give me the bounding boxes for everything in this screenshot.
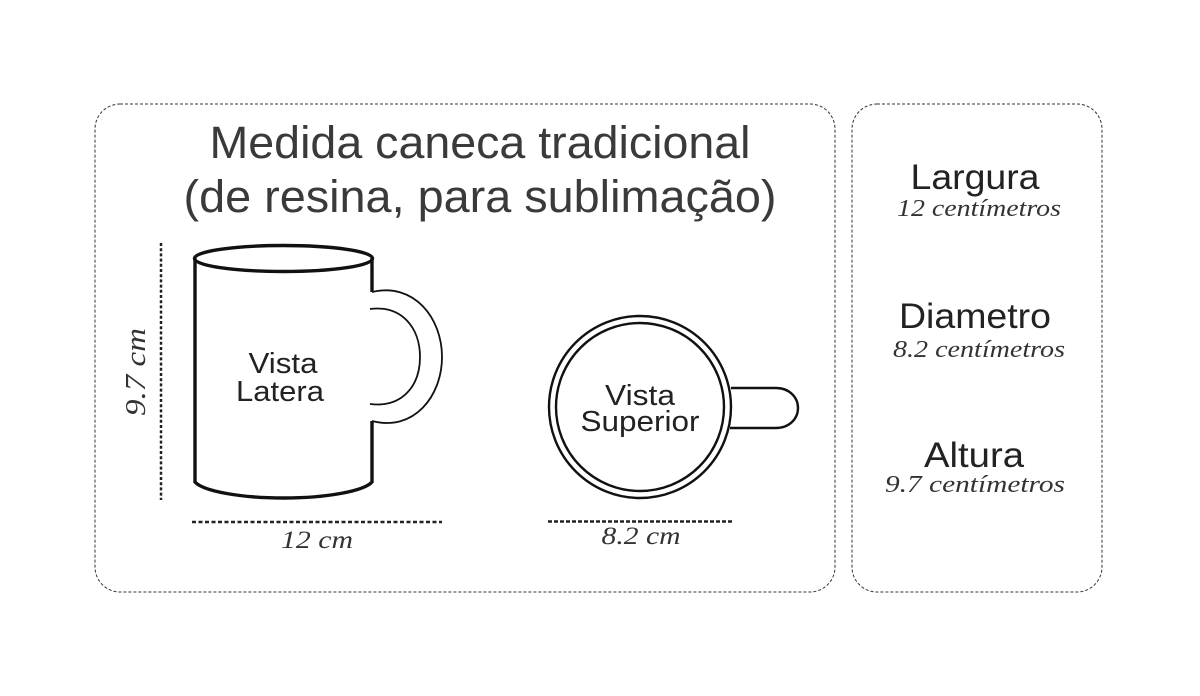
item: altura [885,436,1065,498]
panel: mug measurements [95,104,835,592]
icon: mug top view [549,316,798,498]
label: top view: Vista [605,380,676,412]
item: largura [897,158,1061,222]
label: side view: Latera [236,376,325,408]
dimension: width: 12 cm [281,527,353,554]
item: largura: 12 centímetros [897,196,1061,222]
item: largura: Largura [910,158,1040,197]
item: altura: Altura [924,436,1025,475]
title [184,117,776,222]
label: side view [236,348,325,408]
panel: measurements list [852,104,1102,592]
dimension: diameter: 8.2 cm [602,523,680,550]
title: (de resina, para sublimação) [184,171,776,222]
label: side view: Vista [248,348,318,380]
item: diametro: 8.2 centímetros [893,337,1065,363]
title: Medida caneca tradicional [210,117,750,168]
dimension: height: 9.7 cm [121,328,152,416]
item: altura: 9.7 centímetros [885,472,1065,498]
item: diametro: Diametro [899,297,1051,336]
label: top view: Superior [580,406,700,438]
icon: mug side view [194,246,442,498]
label: top view [580,380,700,438]
item: diametro [893,297,1065,363]
